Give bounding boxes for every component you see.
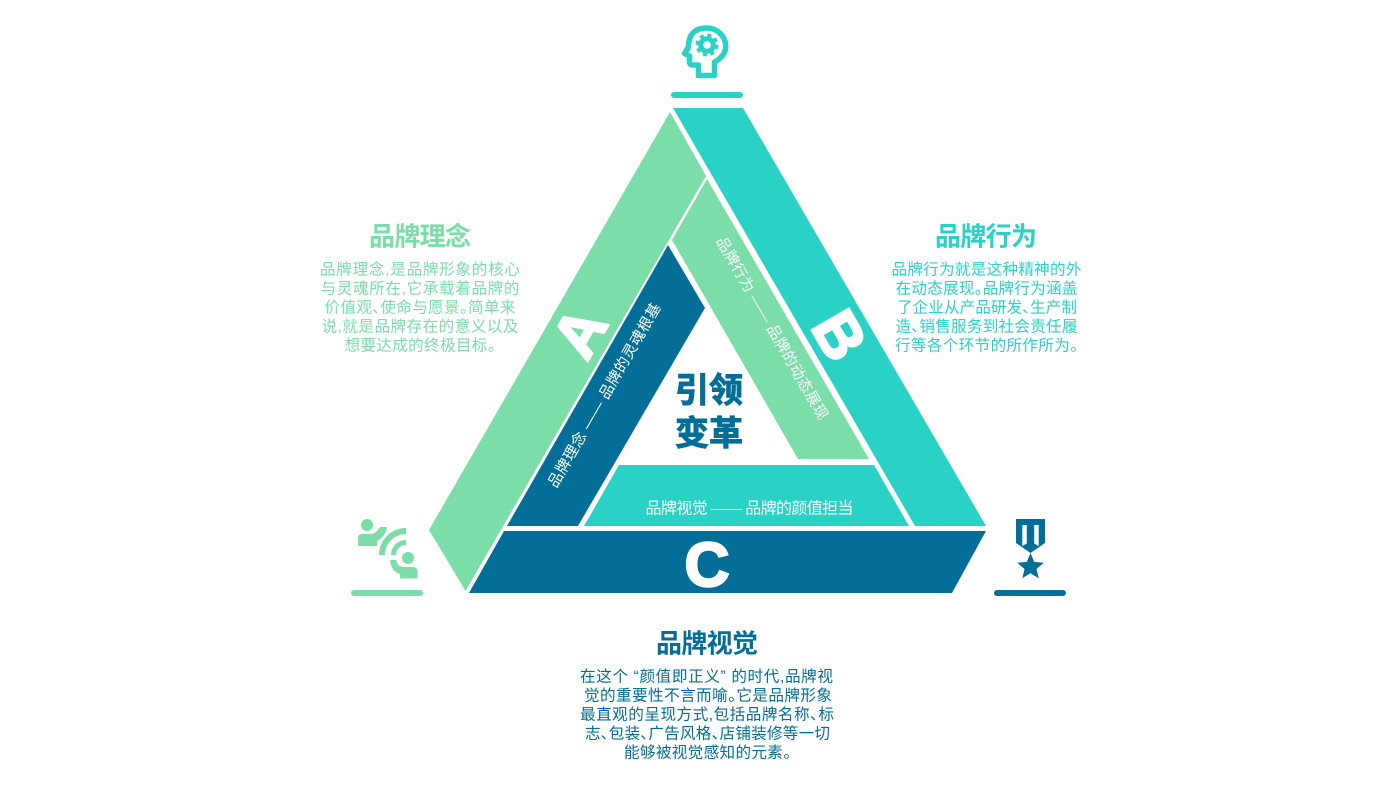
inner band: teal brand visual xyxy=(584,465,909,526)
panel: brand concept xyxy=(320,222,520,354)
icon: medal with star xyxy=(1016,519,1045,578)
icon: head with gear xyxy=(684,28,726,78)
text block: brand concept: 想要达成的终极目标。 xyxy=(344,336,496,354)
text block: brand visual: 志、包装、广告风格、店铺装修等一切 xyxy=(585,724,830,742)
inner band: green brand behaviour xyxy=(672,179,869,459)
triangle diagram xyxy=(429,108,986,600)
icon: people communicating xyxy=(358,519,418,578)
band A: green outer side xyxy=(429,112,706,591)
inner label: brand concept: 品牌理念 —— 品牌的灵魂根基 xyxy=(544,300,665,491)
panel: brand visual xyxy=(580,628,834,762)
heading: brand behaviour: 品牌行为 xyxy=(935,222,1037,252)
bar under medal icon xyxy=(994,590,1066,596)
panel: brand behaviour xyxy=(892,222,1082,354)
bar under people icon xyxy=(351,590,423,596)
letter A: A xyxy=(539,296,621,369)
letter B: B xyxy=(798,299,880,372)
band B: teal outer side xyxy=(673,108,986,526)
centre title: 引领 xyxy=(675,372,743,410)
text block: brand concept: 与灵魂所在,它承载着品牌的 xyxy=(320,280,520,298)
text block: brand visual: 能够被视觉感知的元素。 xyxy=(624,744,791,762)
inner label: brand visual: 品牌视觉 —— 品牌的颜值担当 xyxy=(646,500,854,518)
centre title xyxy=(675,372,743,453)
heading: brand visual: 品牌视觉 xyxy=(656,628,758,658)
bar under head icon xyxy=(671,92,743,98)
text block: brand behaviour: 在动态展现。品牌行为涵盖 xyxy=(896,280,1078,298)
text block: brand visual: 最直观的呈现方式,包括品牌名称、标 xyxy=(580,706,834,724)
text block: brand visual: 觉的重要性不言而喻。它是品牌形象 xyxy=(584,686,832,704)
centre title: 变革 xyxy=(675,415,743,453)
text block: brand concept: 品牌理念,是品牌形象的核心 xyxy=(320,260,520,278)
text block: brand visual xyxy=(580,668,834,762)
text block: brand behaviour: 造、销售服务到社会责任履 xyxy=(896,318,1078,336)
text block: brand concept xyxy=(320,260,520,354)
text block: brand behaviour: 品牌行为就是这种精神的外 xyxy=(892,260,1082,278)
text block: brand concept: 说,就是品牌存在的意义以及 xyxy=(322,316,519,336)
text block: brand concept: 价值观、使命与愿景。简单来 xyxy=(324,298,516,316)
letter C: C xyxy=(685,531,729,600)
text block: brand behaviour: 了企业从产品研发、生产制 xyxy=(897,298,1077,316)
heading: brand concept: 品牌理念 xyxy=(369,222,471,252)
inner band: navy brand concept xyxy=(507,245,705,526)
inner label: brand behaviour: 品牌行为 —— 品牌的动态展现 xyxy=(712,234,831,423)
text block: brand visual: 在这个 “颜值即正义” 的时代,品牌视 xyxy=(580,668,833,686)
text block: brand behaviour xyxy=(892,260,1082,354)
band C: navy outer side xyxy=(469,531,986,593)
text block: brand behaviour: 行等各个环节的所作所为。 xyxy=(895,336,1078,354)
